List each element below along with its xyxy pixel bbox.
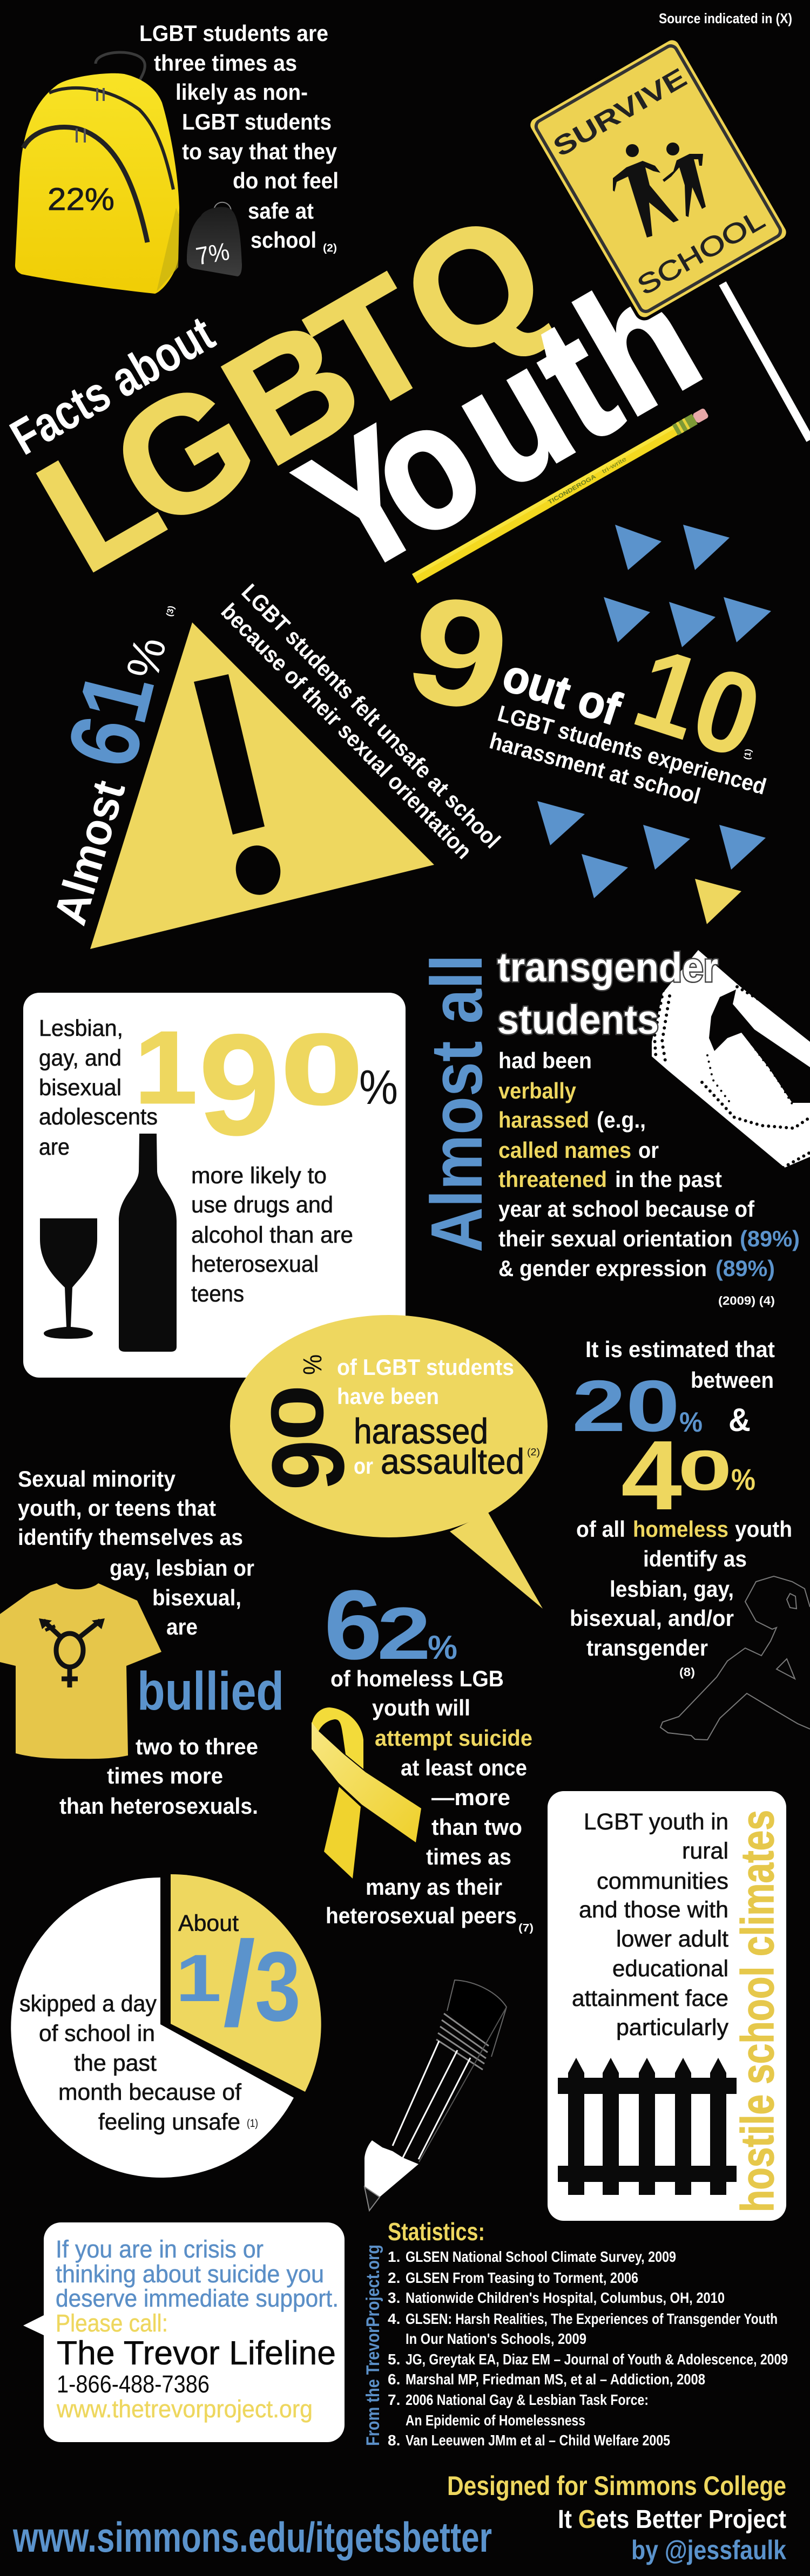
stat: 20% and 40% homeless youth: 20 — [572, 1365, 680, 1447]
text: harassed or assaulted: or — [354, 1453, 373, 1479]
text: three times as likely: LGBT students — [182, 109, 332, 134]
text: sexual minority youth: bisexual, — [152, 1585, 241, 1610]
text: statistics sources list: Nationwide Children's Hospital, Columbus, OH, 2010 — [406, 2289, 725, 2306]
stat: 9 out of 10: out of — [497, 649, 627, 735]
icons: tally triangles, 9 blue and 1 yellow — [537, 525, 771, 924]
text: statistics sources list — [388, 2218, 788, 2449]
text: sexual minority youth: Sexual minority — [18, 1466, 176, 1492]
text: statistics sources list: 2. — [388, 2269, 400, 2286]
stat: 20% and 40% homeless youth: (8) — [679, 1665, 695, 1679]
chart: pie, about 1/3 skipped school — [11, 1874, 321, 2178]
icon: yellow t-shirt with transgender symbol — [0, 1583, 161, 1759]
text: statistics sources list: 2006 National Gay & Lesbian Task Force: — [406, 2391, 649, 2408]
stat: 9 out of 10: 9 — [393, 561, 524, 747]
text: transgender students harassed: had been — [498, 1048, 592, 1073]
icon: seated person silhouette outline — [660, 1576, 810, 1740]
stat: 62% attempt suicide: many as their — [366, 1874, 502, 1900]
text: statistics sources list: In Our Nation's Schools, 2009 — [406, 2330, 586, 2347]
stat: 90% rotated: 9 — [251, 1440, 366, 1490]
stat: 190%: 9 — [198, 1004, 280, 1165]
text: transgender students harassed: called names — [498, 1137, 631, 1163]
stat: 62% attempt suicide: attempt suicide — [375, 1725, 532, 1751]
text: three times as likely: three times as — [154, 50, 297, 76]
text: three times as likely: do not feel — [233, 168, 339, 193]
icon: small black backpack with 7%: 7% — [194, 237, 232, 270]
text: three times as likely — [139, 21, 339, 254]
credits: It Gets Better Project — [558, 2505, 786, 2534]
text: statistics sources list: 3. — [388, 2289, 400, 2306]
text: harassed or assaulted — [337, 1354, 540, 1481]
label: skipped a day of school: (1) — [247, 2118, 258, 2130]
text: statistics sources list: 6. — [388, 2371, 400, 2388]
credits: by @jessfaulk — [631, 2535, 786, 2565]
stat: 62% attempt suicide: 2 — [377, 1592, 431, 1675]
label: From the TrevorProject.org: From the TrevorProject.org — [363, 2245, 383, 2446]
stat: Almost 61%: % — [117, 632, 177, 684]
text: transgender students harassed: transgender — [497, 945, 718, 991]
text: transgender students harassed: (89%) — [716, 1256, 775, 1281]
text: statistics sources list: Statistics: — [388, 2218, 485, 2246]
panel: Trevor Lifeline callout: Please call: — [56, 2309, 168, 2337]
text: felt unsafe at school: because of their sexual orientation — [217, 598, 477, 864]
text: transgender students harassed: their sexual orientation — [498, 1226, 733, 1251]
text: harassed or assaulted: (2) — [527, 1447, 540, 1458]
text: statistics sources list: An Epidemic of Homelessness — [406, 2412, 585, 2429]
stat: 9 out of 10: harassment at school — [487, 728, 703, 809]
text: three times as likely: safe at — [248, 198, 314, 223]
panel: Trevor Lifeline callout — [23, 2222, 345, 2442]
stat: 190%: 0 — [281, 1014, 363, 1126]
stat: 62% attempt suicide: 6 — [324, 1569, 382, 1680]
text: rural communities — [572, 1809, 728, 2041]
stat: 62% attempt suicide — [324, 1569, 534, 1934]
stat: Almost 61%: (3) — [165, 605, 177, 618]
stat: Almost 61%: 61 — [46, 661, 175, 777]
panel: Trevor Lifeline callout: If you are in crisis or — [56, 2235, 264, 2263]
stat: 9 out of 10: (1) — [742, 748, 753, 761]
text: statistics sources list: Marshal MP, Friedman MS, et al – Addiction, 2008 — [406, 2371, 705, 2388]
stat: 62% attempt suicide: at least once — [401, 1755, 527, 1780]
stat: Almost 61%: Almost — [44, 775, 135, 930]
text: Lesbian gay bisexual: bisexual — [39, 1075, 122, 1101]
source note: Source indicated in (X) — [659, 10, 792, 26]
text: transgender students harassed: students — [497, 997, 659, 1043]
label: skipped a day of school: month because of — [58, 2079, 242, 2105]
text: bullied two to three times: bullied — [137, 1661, 284, 1721]
stat: 62% attempt suicide: % — [428, 1629, 457, 1666]
text: sexual minority youth: identify themselves as — [18, 1524, 243, 1550]
stat: 190%: % — [359, 1061, 398, 1115]
text: bullied two to three times — [59, 1661, 284, 1819]
image: halftone hand — [652, 950, 810, 1168]
text: statistics sources list: GLSEN From Teasing to Torment, 2006 — [406, 2269, 638, 2286]
text: bullied two to three times: than heterosexuals. — [59, 1793, 258, 1819]
label: skipped a day of school: the past — [74, 2050, 157, 2076]
stat: 190%: 1 — [134, 1011, 197, 1125]
text: more likely: heterosexual — [191, 1251, 319, 1277]
heading: Almost all: Almost all — [416, 954, 497, 1252]
text: more likely — [191, 1163, 353, 1307]
text: sexual minority youth: are — [166, 1614, 198, 1639]
stat: 20% and 40% homeless youth: youth — [735, 1516, 792, 1542]
stat: 20% and 40% homeless youth: % — [679, 1407, 703, 1438]
callout: 90% speech bubble — [230, 1315, 548, 1609]
text: transgender students harassed: threatened — [498, 1167, 607, 1192]
icon: iron fence — [558, 2058, 737, 2195]
stat: 20% and 40% homeless youth: It is estimated that — [585, 1337, 775, 1362]
text: rural communities: communities — [597, 1868, 728, 1894]
icon: yellow awareness ribbon — [312, 1707, 421, 1879]
icon: warning triangle — [90, 622, 434, 949]
text: transgender students harassed: harassed — [498, 1107, 589, 1133]
text: three times as likely: likely as non- — [176, 79, 308, 105]
stat: 20% and 40% homeless youth: % — [731, 1462, 755, 1496]
icon: Ticonderoga pencil: tri-write — [601, 456, 627, 475]
panel: hostile school climates — [548, 1791, 786, 2221]
text: rural communities: educational — [612, 1956, 728, 1982]
credits — [447, 2471, 786, 2565]
text: more likely: teens — [191, 1281, 244, 1307]
label: hostile school climates vertical: hostile school climates — [732, 1810, 784, 2212]
stat: 90% rotated: 0 — [256, 1384, 339, 1441]
stat: 20% and 40% homeless youth: 0 — [678, 1439, 732, 1502]
stat: 20% and 40% homeless youth: bisexual, and/or — [570, 1605, 734, 1631]
text: three times as likely: school — [251, 227, 316, 253]
text: felt unsafe at school: LGBT students felt unsafe at school — [237, 579, 505, 853]
label: About 1/3 — [176, 1910, 301, 2051]
footer url: www.simmons.edu/itgetsbetter — [12, 2513, 492, 2561]
text: statistics sources list: GLSEN National School Climate Survey, 2009 — [406, 2248, 676, 2265]
icon: black pencil — [364, 1980, 507, 2211]
label: skipped a day of school — [19, 1991, 258, 2135]
icon: Ticonderoga pencil — [412, 407, 710, 584]
stat: 62% attempt suicide: than two — [431, 1814, 522, 1840]
stat: 62% attempt suicide: youth will — [372, 1695, 470, 1720]
text: transgender students harassed: (2009) (4) — [718, 1294, 775, 1307]
text: harassed or assaulted: assaulted — [381, 1441, 524, 1481]
text: sexual minority youth: youth, or teens that — [18, 1495, 216, 1521]
text: statistics sources list: 4. — [388, 2310, 400, 2327]
icon: wine glass — [40, 1218, 97, 1339]
text: three times as likely: (2) — [323, 242, 337, 254]
stat: 20% and 40% homeless youth: & — [728, 1402, 751, 1438]
text: three times as likely: to say that they — [182, 139, 338, 164]
text: sexual minority youth — [18, 1466, 254, 1639]
stat: 20% and 40% homeless youth: lesbian, gay, — [610, 1576, 734, 1602]
stat: 62% attempt suicide: times as — [426, 1844, 511, 1869]
text: bullied two to three times: two to three — [136, 1734, 258, 1759]
text: statistics sources list: 1. — [388, 2248, 400, 2265]
text: rural communities: LGBT youth in — [584, 1809, 728, 1835]
text: harassed or assaulted: have been — [337, 1384, 439, 1409]
stat: 62% attempt suicide: —more — [431, 1785, 510, 1810]
stat: Almost 61% — [44, 605, 177, 930]
text: Lesbian gay bisexual — [39, 1015, 158, 1160]
label: skipped a day of school: skipped a day — [19, 1991, 157, 2017]
icon: sign pole — [723, 283, 810, 440]
stat: 9 out of 10: LGBT students experienced — [495, 700, 769, 799]
label: About 1/3: About — [178, 1910, 239, 1936]
stat: 20% and 40% homeless youth: transgender — [586, 1635, 708, 1660]
icon: bottle — [119, 1134, 177, 1352]
label: About 1/3: / — [223, 1917, 255, 2051]
panel: Trevor Lifeline callout: www.thetrevorproject.org — [56, 2395, 313, 2423]
text: rural communities: particularly — [616, 2015, 728, 2041]
icon: Survive School road sign: SURVIVE — [548, 62, 692, 162]
text: more likely: alcohol than are — [191, 1222, 353, 1248]
text: Lesbian gay bisexual: adolescents — [39, 1104, 158, 1130]
text: Lesbian gay bisexual: are — [39, 1134, 70, 1160]
text: harassed or assaulted: harassed — [354, 1411, 488, 1451]
stat: 20% and 40% homeless youth: homeless — [633, 1516, 728, 1542]
text: bullied two to three times: times more — [107, 1763, 223, 1788]
text: more likely: more likely to — [191, 1163, 327, 1189]
icon: Ticonderoga pencil: TICONDEROGA — [547, 473, 597, 506]
text: transgender students harassed: or — [638, 1137, 659, 1163]
icon: Survive School road sign: SCHOOL — [632, 204, 770, 301]
title: Facts about: Facts about — [2, 306, 223, 465]
text: harassed or assaulted: of LGBT students — [337, 1354, 514, 1380]
stat: 20% and 40% homeless youth: 4 — [621, 1420, 682, 1530]
text: statistics sources list: 8. — [388, 2432, 400, 2449]
panel: Trevor Lifeline callout: 1-866-488-7386 — [57, 2370, 210, 2398]
label: skipped a day of school: feeling unsafe — [98, 2109, 240, 2135]
panel: Trevor Lifeline callout: The Trevor Lifeline — [57, 2335, 336, 2372]
stat: 62% attempt suicide: of homeless LGB — [330, 1666, 504, 1691]
text: transgender students harassed: & gender expression — [498, 1256, 707, 1281]
stat: 62% attempt suicide: heterosexual peers — [326, 1903, 517, 1928]
text: transgender students harassed: verbally — [498, 1078, 577, 1103]
text: transgender students harassed: (89%) — [740, 1226, 800, 1251]
stat: 62% attempt suicide: (7) — [518, 1922, 534, 1934]
text: statistics sources list: Van Leeuwen JMm et al – Child Welfare 2005 — [406, 2432, 670, 2449]
text: transgender students harassed: year at school because of — [498, 1196, 755, 1222]
stat: 90% rotated: % — [299, 1354, 327, 1375]
label: skipped a day of school: of school in — [39, 2021, 155, 2046]
text: sexual minority youth: gay, lesbian or — [110, 1555, 254, 1581]
stat: 9 out of 10: 10 — [620, 622, 776, 783]
text: statistics sources list: 5. — [388, 2351, 400, 2368]
text: Lesbian gay bisexual: Lesbian, — [39, 1015, 123, 1041]
icon: Survive School road sign — [525, 36, 791, 322]
icon: yellow backpack with 22% — [15, 52, 179, 294]
text: statistics sources list: 7. — [388, 2391, 400, 2408]
text: rural communities: rural — [682, 1838, 728, 1864]
panel: Trevor Lifeline callout: thinking about suicide you — [56, 2260, 324, 2288]
stat: 90% rotated — [251, 1354, 366, 1490]
text: rural communities: lower adult — [616, 1926, 728, 1952]
stat: 190% — [134, 1004, 398, 1165]
title: LGBTQ: LGBTQ — [11, 176, 575, 607]
label: About 1/3: 3 — [255, 1931, 301, 2042]
title: Youth: Youth — [271, 234, 728, 613]
text: more likely: use drugs and — [191, 1192, 333, 1218]
stat: 20% and 40% homeless youth — [570, 1337, 792, 1679]
text: Lesbian gay bisexual: gay, and — [39, 1045, 122, 1071]
label: About 1/3: 1 — [176, 1941, 221, 2016]
text: transgender students harassed: (e.g., — [597, 1107, 646, 1133]
stat: 9 out of 10 — [393, 561, 776, 809]
icon: yellow backpack with 22%: 22% — [48, 182, 114, 217]
text: rural communities: and those with — [579, 1897, 728, 1923]
stat: 20% and 40% homeless youth: between — [691, 1367, 774, 1393]
stat: 20% and 40% homeless youth: of all — [576, 1516, 625, 1542]
text: transgender students harassed — [497, 945, 800, 1307]
stat: 20% and 40% homeless youth: identify as — [643, 1546, 747, 1571]
text: transgender students harassed: in the past — [615, 1167, 722, 1192]
panel: Trevor Lifeline callout: deserve immediate support. — [56, 2284, 339, 2312]
icon: small black backpack with 7% — [187, 202, 242, 276]
text: three times as likely: LGBT students are — [139, 21, 328, 46]
text: rural communities: attainment face — [572, 1985, 728, 2011]
panel: 190% drugs and alcohol — [23, 993, 406, 1378]
